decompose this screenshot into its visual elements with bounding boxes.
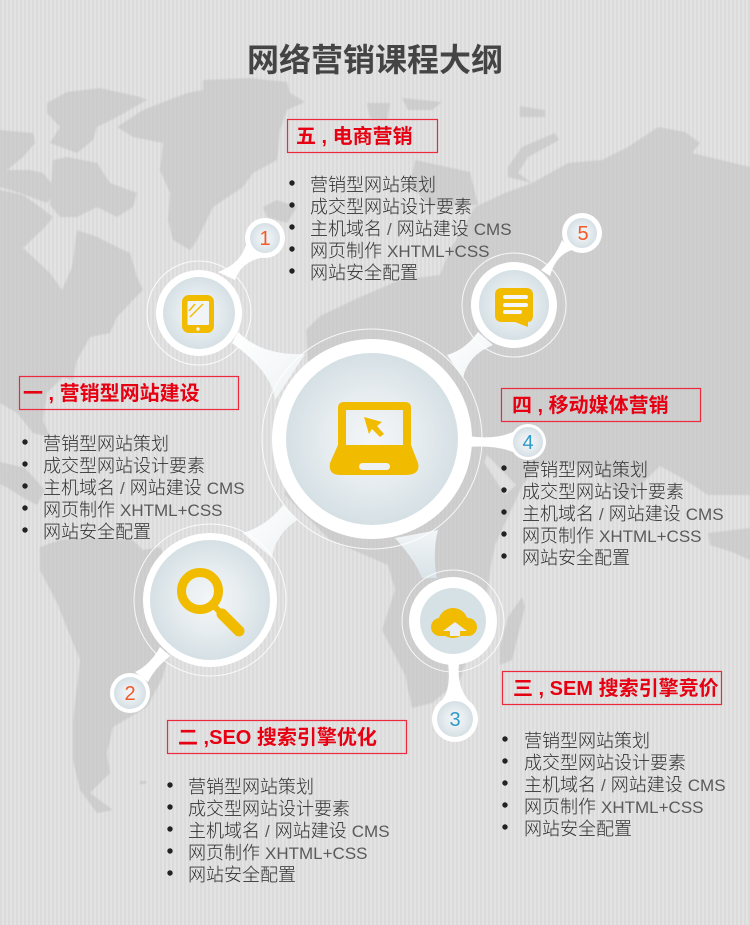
centre node: laptop (262, 329, 482, 549)
section four: mobile media marketing: 网站安全配置 (522, 548, 630, 568)
section three: SEM: 营销型网站策划 (524, 731, 650, 751)
section five: e-commerce marketing: 网页制作 XHTML+CSS (310, 241, 490, 261)
section five: e-commerce marketing: 主机域名 / 网站建设 CMS (310, 219, 512, 239)
section two: SEO: 主机域名 / 网站建设 CMS (188, 821, 390, 841)
node: cloud (402, 570, 504, 672)
section one: marketing website (20, 376, 245, 542)
connector: centre to chat (447, 332, 493, 378)
badge: number 3: 3 (449, 709, 461, 731)
icon: chat bubble (495, 288, 533, 327)
connector: chat to number 5 (541, 240, 572, 276)
badge: number 4: 4 (522, 432, 534, 454)
section two: SEO: 成交型网站设计要素 (188, 799, 350, 819)
section three: SEM: 主机域名 / 网站建设 CMS (524, 775, 726, 795)
badge: number 3 (432, 696, 478, 742)
badge: number 2: 2 (124, 683, 136, 705)
node: magnifier (134, 524, 286, 676)
badge: number 5: 5 (577, 223, 589, 245)
icon: tablet (182, 295, 214, 333)
section one: marketing website: 营销型网站策划 (43, 434, 169, 454)
section four: mobile media marketing: 主机域名 / 网站建设 CMS (522, 504, 724, 524)
icon: cloud upload (431, 608, 477, 638)
section one: marketing website: 主机域名 / 网站建设 CMS (43, 478, 245, 498)
connector: centre to cloud (395, 530, 438, 578)
section two: SEO: 二 ,SEO 搜索引擎优化 (178, 726, 377, 749)
section five: e-commerce marketing: 营销型网站策划 (310, 175, 436, 195)
section one: marketing website: 成交型网站设计要素 (43, 456, 205, 476)
section two: SEO: 营销型网站策划 (188, 777, 314, 797)
section three: SEM: 网页制作 XHTML+CSS (524, 797, 704, 817)
badge: number 1: 1 (259, 228, 271, 250)
section three: SEM: 网站安全配置 (524, 819, 632, 839)
badge: number 2 (110, 673, 150, 713)
connector: centre to magnifier (243, 505, 297, 558)
section five: e-commerce marketing: 五 , 电商营销 (296, 125, 413, 148)
badge: number 5 (562, 213, 602, 253)
badge: number 4 (510, 424, 546, 460)
icon: laptop (330, 402, 418, 475)
title: 网络营销课程大纲 (247, 42, 503, 78)
section four: mobile media marketing: 网页制作 XHTML+CSS (522, 526, 702, 546)
section two: SEO: 网页制作 XHTML+CSS (188, 843, 368, 863)
map sea gap (484, 455, 516, 495)
section one: marketing website: 网页制作 XHTML+CSS (43, 500, 223, 520)
section three: SEM: 成交型网站设计要素 (524, 753, 686, 773)
section four: mobile media marketing: 成交型网站设计要素 (522, 482, 684, 502)
node: tablet (147, 261, 251, 365)
connector: cloud to number 3 (437, 663, 473, 705)
node: chat (462, 253, 566, 357)
section two: SEO: 网站安全配置 (188, 865, 296, 885)
connector: magnifier to number 2 (135, 647, 170, 682)
section five: e-commerce marketing: 成交型网站设计要素 (310, 197, 472, 217)
section four: mobile media marketing: 营销型网站策划 (522, 460, 648, 480)
section three: SEM (502, 672, 726, 839)
section one: marketing website: 网站安全配置 (43, 522, 151, 542)
section four: mobile media marketing (501, 388, 724, 568)
connector: tablet to number 1 (218, 245, 266, 280)
badge: number 1 (245, 218, 285, 258)
section four: mobile media marketing: 四 , 移动媒体营销 (512, 394, 669, 417)
section three: SEM: 三 , SEM 搜索引擎竞价 (513, 677, 719, 700)
icon: magnifier (182, 572, 239, 631)
section five: e-commerce marketing: 网站安全配置 (310, 263, 418, 283)
section five: e-commerce marketing (288, 120, 512, 283)
connector: centre to number 4 (468, 432, 513, 452)
connector: centre to tablet (232, 332, 305, 400)
world map (0, 78, 750, 813)
section one: marketing website: 一 , 营销型网站建设 (23, 382, 200, 405)
section two: SEO (167, 720, 406, 885)
